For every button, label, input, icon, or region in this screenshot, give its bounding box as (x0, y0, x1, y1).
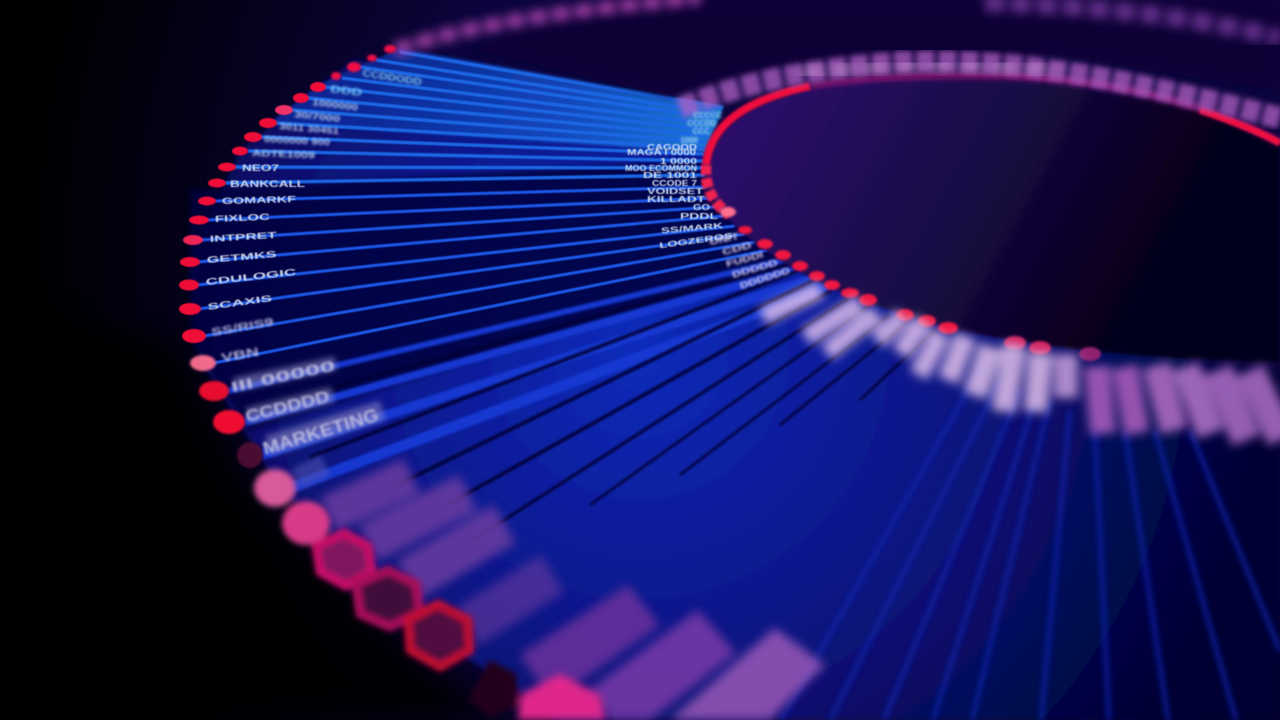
shading: black rim at lower left (0, 300, 510, 720)
labels: lower outer: MARKETING (260, 405, 381, 459)
labels: inner, focused: SS/MARK (661, 221, 724, 235)
labels: lower outer (210, 316, 381, 459)
haze: top bright wedge (268, 48, 724, 152)
labels: inner, focused: MAGA I 0000 (627, 148, 697, 157)
labels: inner, focused: CAGOOD (647, 143, 697, 152)
labels: inner, focused: 1 0000 (660, 157, 698, 166)
spoke gaps: dark separators (240, 264, 935, 540)
labels: lower outer: CCDDDD (244, 389, 331, 426)
labels: inner, focused (625, 143, 734, 250)
outer arc labels: top left (395, 0, 700, 50)
labels: focused outer: SCAXIS (207, 293, 273, 312)
labels: inner, transitioning to blur: FUDDI (725, 249, 764, 269)
ring labels: lower arc (759, 281, 1280, 446)
spokes: upper (225, 52, 722, 183)
labels: upper outer: 30/7000 (294, 109, 341, 124)
ring labels: upper arc (680, 61, 1280, 118)
labels: top outer, out of focus: DDD (330, 84, 363, 99)
labels: upper outer (252, 97, 359, 160)
labels: top outer, out of focus: CCDDODD (362, 68, 423, 88)
labels: focused outer: FIXLOC (215, 212, 271, 224)
labels: inner, top cyan (680, 111, 722, 145)
labels: inner, focused: VOIDSET (647, 187, 703, 196)
labels: inner, top cyan: CCC (693, 127, 710, 136)
labels: inner, focused: MOO ECOMMON (625, 164, 697, 173)
labels: upper outer: 1000000 (312, 97, 359, 113)
labels: inner, top cyan: 1000 (680, 136, 699, 145)
labels: focused outer: INTPRET (210, 230, 278, 244)
outer arc labels: top right (985, 3, 1280, 38)
labels: upper outer: 0000000 900 (264, 134, 330, 147)
labels: lower outer: VBN (220, 345, 260, 365)
labels: inner, transitioning to blur: UNIT (708, 231, 740, 247)
labels: inner, transitioning to blur (708, 231, 792, 291)
labels: focused outer: NEO7 (242, 163, 279, 173)
outer labels: near-focus bars (233, 356, 385, 489)
inner hole of ring (706, 78, 1280, 362)
labels: inner, focused: DE 1001 (643, 171, 698, 180)
outer node dots: focused (179, 82, 326, 343)
labels: inner, transitioning to blur: DDDDDD (739, 265, 792, 291)
labels: focused outer (205, 163, 306, 312)
dark haze over top area (470, 0, 1280, 96)
labels: focused outer: CDULOGIC (205, 267, 298, 287)
labels: inner, focused: PDDL (680, 212, 718, 221)
labels: inner, focused: LOGZEROS (659, 231, 734, 250)
labels: inner, focused: GO (693, 203, 710, 212)
shading: dark sector behind focused spokes (190, 160, 790, 430)
outer labels: blurred foreground (320, 458, 825, 720)
outer node dots: top (331, 45, 396, 80)
ring node dots (720, 207, 1101, 361)
labels: upper outer: 3011 30451 (279, 121, 339, 136)
labels: focused outer: GETMKS (206, 249, 277, 265)
labels: inner, focused: KILLADT (647, 195, 705, 204)
haze: spoke field (190, 60, 1280, 720)
labels: inner, transitioning to blur: DDDDD (731, 257, 779, 280)
spokes: lower, wide bands (228, 260, 832, 488)
labels: upper outer: ADTE1009 (252, 148, 315, 160)
labels: inner, focused: CCODE 7 (652, 179, 698, 188)
red ring (706, 76, 1280, 215)
labels: lower outer: III 00000 (229, 357, 337, 395)
outer node dots: lower (190, 355, 263, 468)
labels: lower outer: SS/RIS9 (210, 316, 275, 339)
labels: inner, top cyan: CCCDD (687, 119, 716, 128)
labels: focused outer: BANKCALL (230, 179, 306, 189)
spokes: blurred foreground (781, 360, 1280, 720)
labels: inner, top cyan: CCCCC (693, 111, 722, 120)
labels: focused outer: GOMARKF (222, 194, 297, 206)
labels: top outer, out of focus (330, 68, 423, 99)
spokes: focused middle (197, 187, 768, 363)
labels: inner, transitioning to blur: CDD (721, 240, 753, 257)
outer node dots: bokeh hexagons (254, 469, 606, 720)
